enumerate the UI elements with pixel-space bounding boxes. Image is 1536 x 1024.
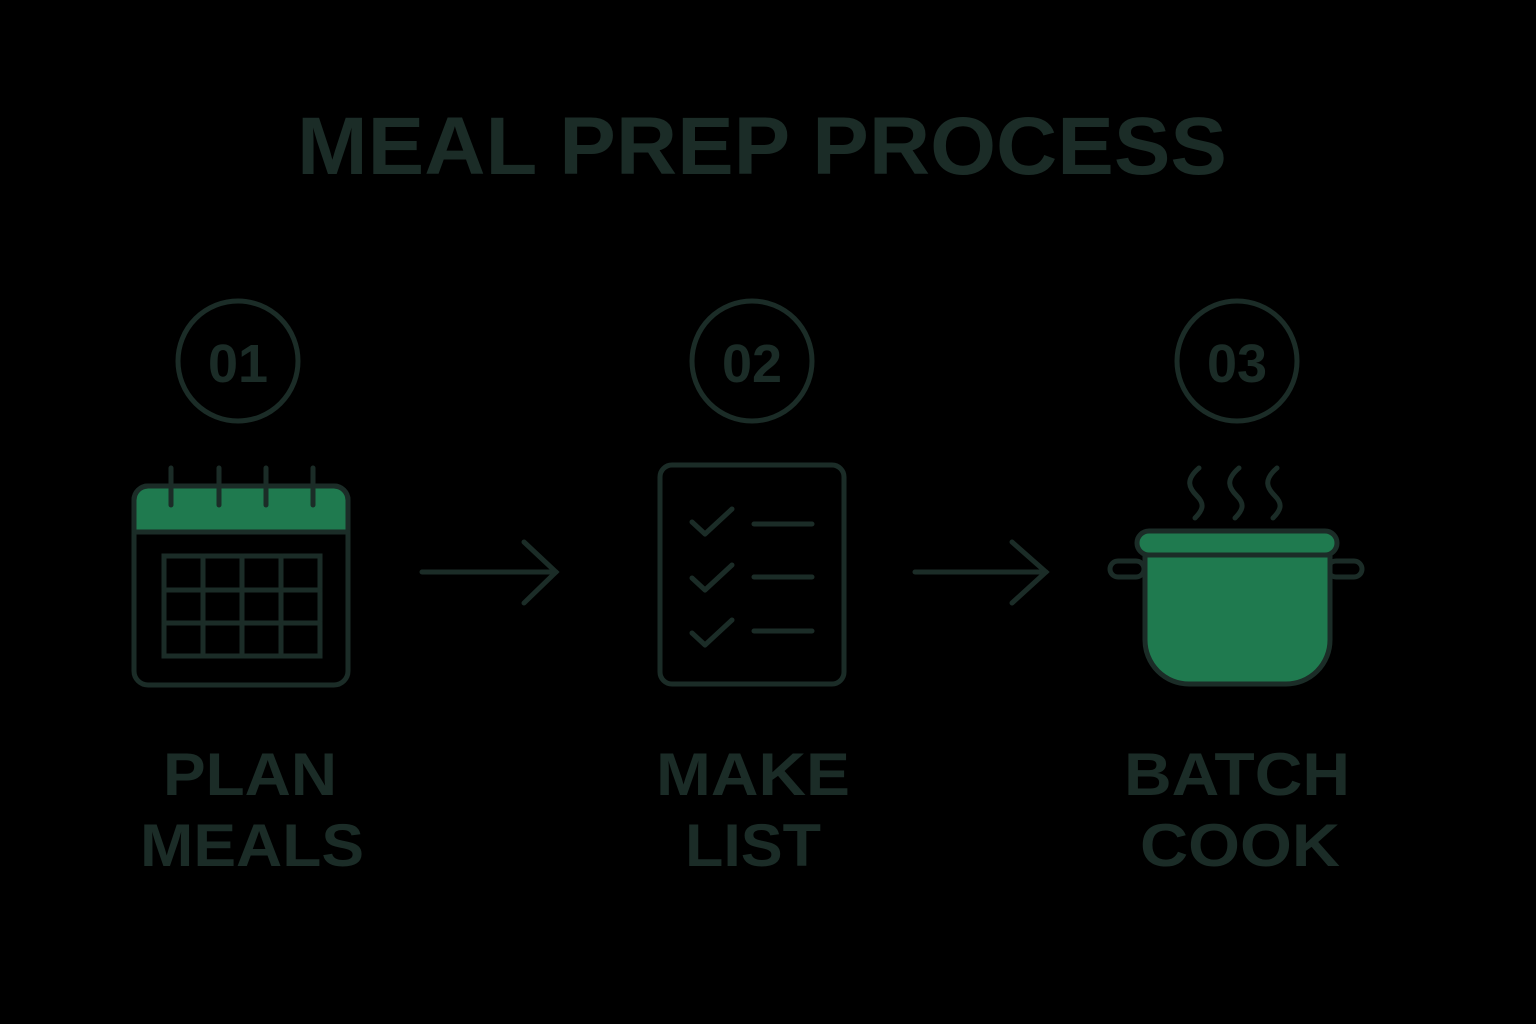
arrow 2 bbox=[915, 542, 1046, 603]
icon: calendar bbox=[134, 468, 348, 685]
title: MEAL PREP PROCESS bbox=[297, 101, 1227, 192]
step 3 number badge bbox=[1177, 301, 1297, 421]
step 2 number badge bbox=[692, 301, 812, 421]
step 3 number badge: 03 bbox=[1207, 334, 1267, 394]
step 1 number badge bbox=[178, 301, 298, 421]
label: batch cook: BATCH bbox=[1124, 741, 1350, 808]
step 2 number badge: 02 bbox=[722, 334, 782, 394]
label: plan meals: PLAN bbox=[163, 741, 337, 808]
icon: cooking pot bbox=[1110, 468, 1362, 684]
label: plan meals: MEALS bbox=[140, 812, 364, 879]
step 1 number badge: 01 bbox=[208, 334, 268, 394]
label: make list: MAKE bbox=[656, 741, 850, 808]
label: make list: LIST bbox=[685, 812, 821, 879]
icon: checklist bbox=[660, 465, 844, 684]
label: batch cook: COOK bbox=[1140, 812, 1340, 879]
arrow 1 bbox=[422, 542, 556, 603]
